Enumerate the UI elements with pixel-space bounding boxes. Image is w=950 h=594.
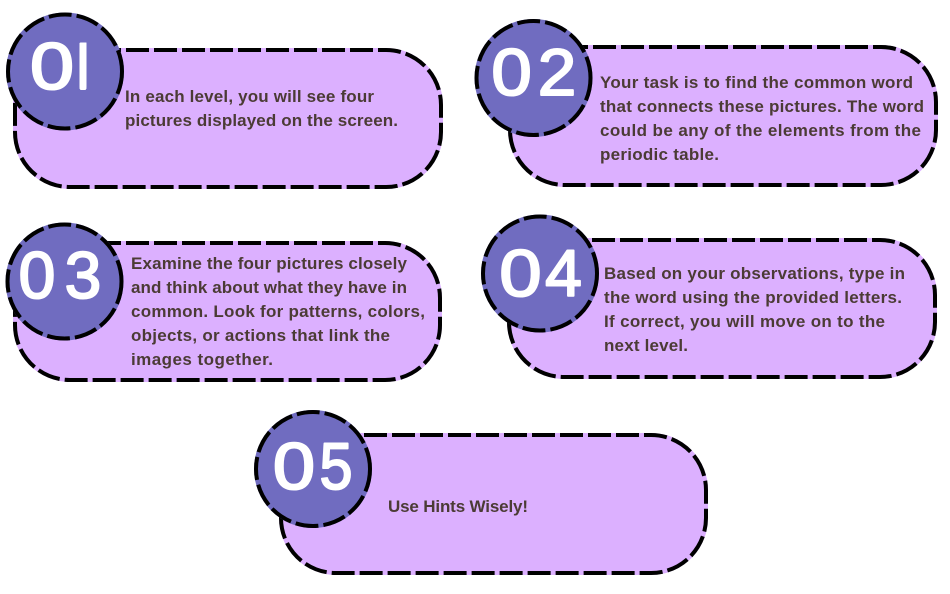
text: step 2: periodic table. <box>600 145 719 164</box>
text: step 4: the word using the provided letters. <box>604 288 902 307</box>
badge: 02 <box>476 21 590 135</box>
text: step 1: In each level, you will see four <box>125 87 374 106</box>
panel: step 5 <box>281 435 706 573</box>
text: step 4: next level. <box>604 336 688 355</box>
badge: 04: 0 <box>499 238 542 311</box>
badge: 05: 5 <box>319 430 353 504</box>
badge: 01: 1 <box>64 29 100 103</box>
text: step 2: could be any of the elements from the <box>600 121 921 140</box>
panel: step 3 <box>15 243 440 380</box>
text: step 4: Based on your observations, type in <box>604 264 905 283</box>
text: step 3 <box>131 254 425 369</box>
text: step 4 <box>604 264 905 355</box>
step 2 <box>476 21 936 185</box>
step 4 <box>483 216 935 377</box>
badge: 04: 4 <box>545 236 582 310</box>
badge: 03: 3 <box>65 238 101 312</box>
text: step 3: Examine the four pictures closely <box>131 254 408 273</box>
text: step 3: and think about what they have in <box>131 278 407 297</box>
badge: 02: 0 <box>491 35 532 109</box>
badge: 03: 0 <box>19 238 55 312</box>
text: step 5: Use Hints Wisely! <box>388 497 528 516</box>
text: step 3: images together. <box>131 350 273 369</box>
text: step 1 <box>125 87 398 130</box>
text: step 2 <box>600 73 924 164</box>
text: step 1: pictures displayed on the screen. <box>125 111 398 130</box>
panel: step 2 <box>510 47 936 185</box>
badge: 05: 0 <box>273 431 315 504</box>
badge: 02: 2 <box>538 36 576 110</box>
text: step 3: objects, or actions that link the <box>131 326 390 345</box>
panel: step 1 <box>15 50 441 187</box>
text: step 4: If correct, you will move on to the <box>604 312 885 331</box>
badge: 01 <box>8 14 122 128</box>
badge: 03 <box>8 224 122 338</box>
panel: step 4 <box>509 240 935 377</box>
text: step 2: Your task is to find the common word <box>600 73 913 92</box>
badge: 04 <box>483 216 597 330</box>
step 1 <box>8 14 441 187</box>
badge: 05 <box>256 412 370 526</box>
text: step 3: common. Look for patterns, colors, <box>131 302 425 321</box>
step 5 <box>256 412 706 573</box>
text: step 2: that connects these pictures. The word <box>600 97 924 116</box>
step 3 <box>8 224 440 380</box>
badge: 01: 0 <box>30 30 74 103</box>
